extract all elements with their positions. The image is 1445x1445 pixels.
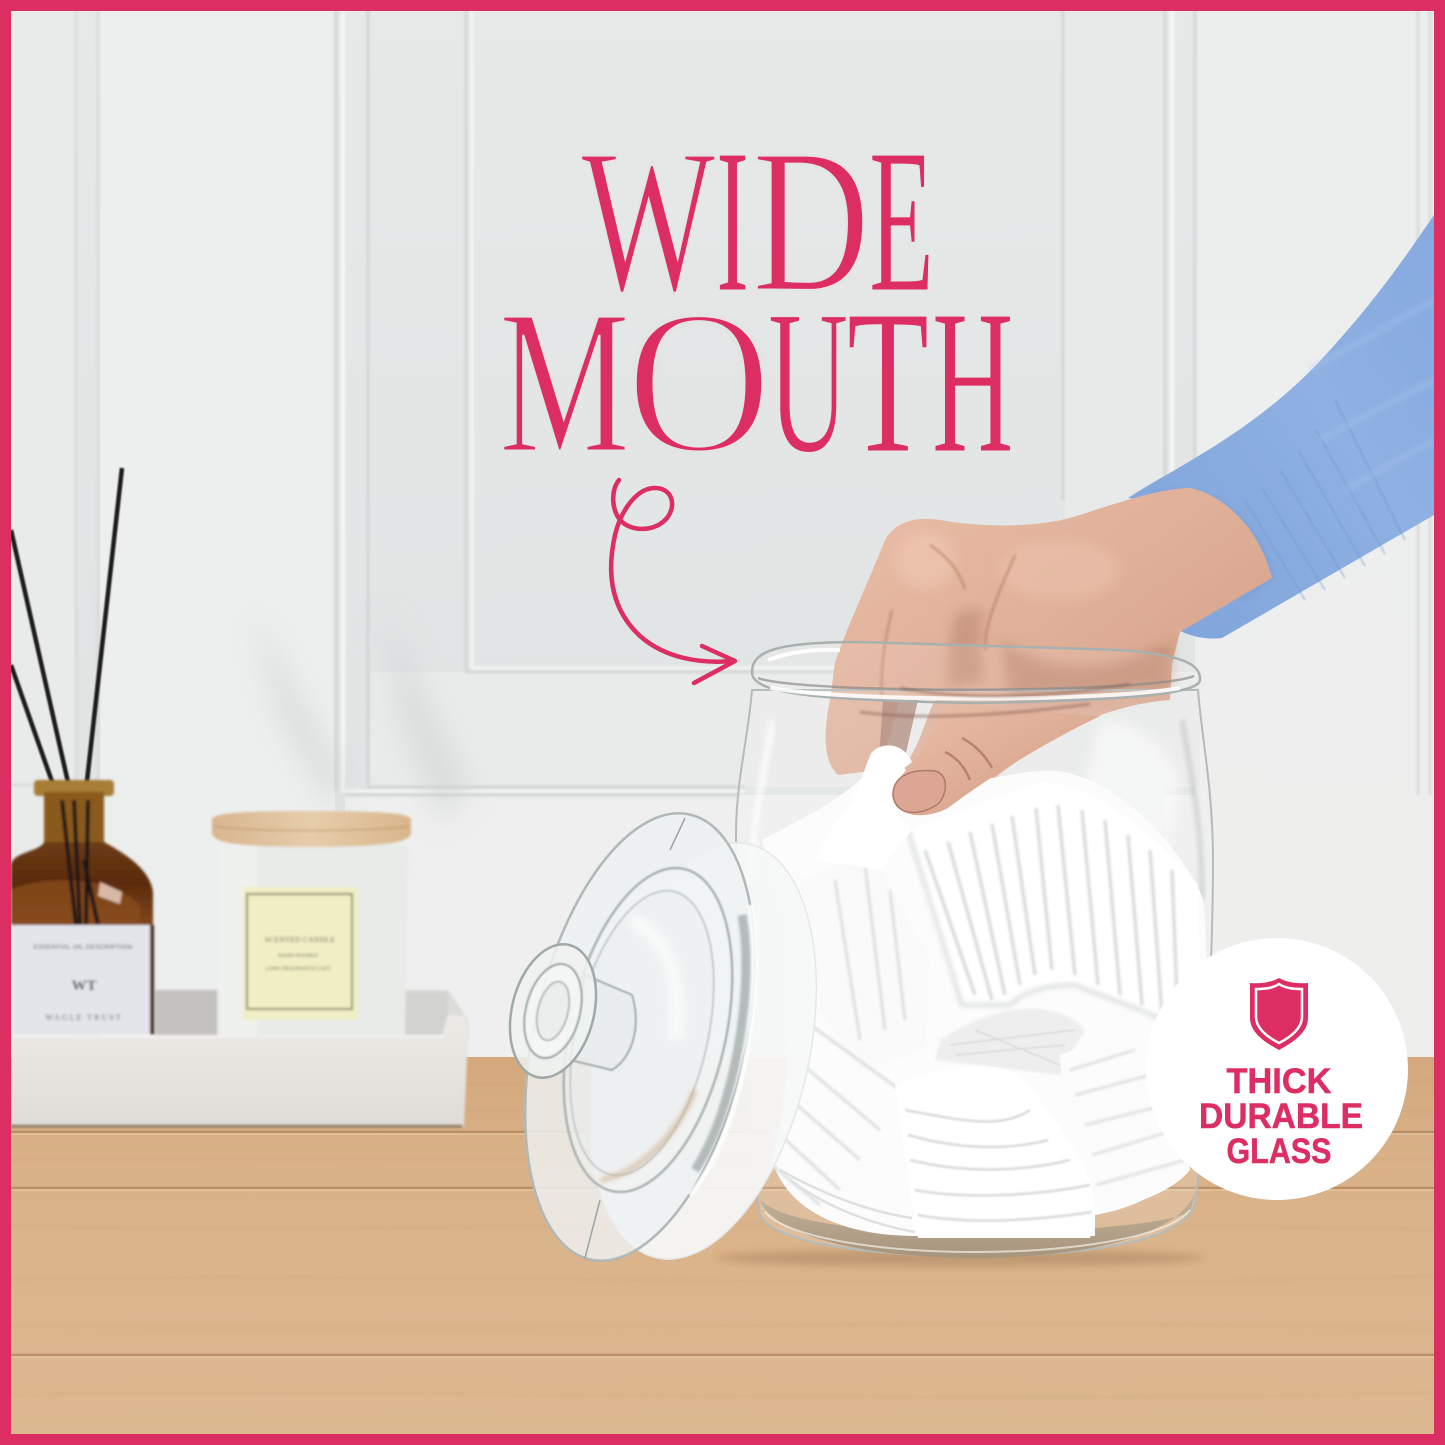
cotton pad stacks: [762, 745, 1206, 1238]
heading: wide mouth: T: [847, 267, 929, 496]
jar base: [760, 1190, 1196, 1258]
jar rim: [752, 642, 1200, 703]
heading: wide mouth: [499, 106, 1014, 496]
jar body: [736, 690, 1213, 1256]
heading: wide mouth: D: [752, 106, 870, 335]
lid glass dome: [487, 791, 793, 1283]
icon: shield: [1250, 978, 1308, 1050]
pinched cotton tuft: [815, 745, 912, 870]
background: paneled wall: [0, 0, 1445, 1070]
bottle label text: WAGLE TRUST: [45, 1013, 123, 1022]
heading: wide mouth: W: [581, 106, 716, 335]
tray back: [155, 990, 468, 1040]
heading: wide mouth: M: [499, 267, 630, 496]
bottle label text: WT: [71, 978, 97, 994]
badge text: GLASS: [1226, 1132, 1332, 1171]
badge text: DURABLE: [1199, 1097, 1363, 1136]
heading: wide mouth: U: [768, 267, 848, 496]
amber diffuser bottle: [11, 780, 154, 1035]
blue sweater sleeve: [1128, 215, 1434, 639]
heading: wide mouth: I: [716, 106, 749, 335]
heading: wide mouth: H: [932, 267, 1014, 496]
tray front: [11, 1015, 468, 1126]
thumb over cotton: [893, 706, 1100, 815]
badge: thick durable glass: [1146, 938, 1408, 1200]
lid knob: [570, 975, 636, 1070]
reed diffuser sticks: [11, 468, 122, 810]
candle label text: LONG FRAGRANCE LAST: [265, 966, 331, 972]
bottle label text: [34, 944, 132, 1022]
candle label text: HAND-POURED: [278, 953, 318, 959]
wooden table top: [0, 1057, 1445, 1445]
candle label text: SCENTED CANDLE: [265, 935, 335, 944]
heading: wide mouth: E: [869, 106, 934, 335]
candle label text: [265, 935, 335, 972]
glass lid with frosted seal and knob: [487, 791, 853, 1283]
scented candle: [212, 811, 411, 1036]
glass jar with cotton pads: [736, 642, 1213, 1258]
bottle label text: ESSENTIAL OIL DESCRIPTION: [34, 944, 132, 951]
badge text: THICK: [1226, 1062, 1332, 1101]
badge text: [1199, 1062, 1363, 1171]
hand reaching into jar: [826, 488, 1272, 817]
frosted seal: [553, 821, 853, 1281]
heading: wide mouth: O: [626, 267, 772, 496]
curly arrow pointing to jar mouth: [611, 480, 735, 683]
